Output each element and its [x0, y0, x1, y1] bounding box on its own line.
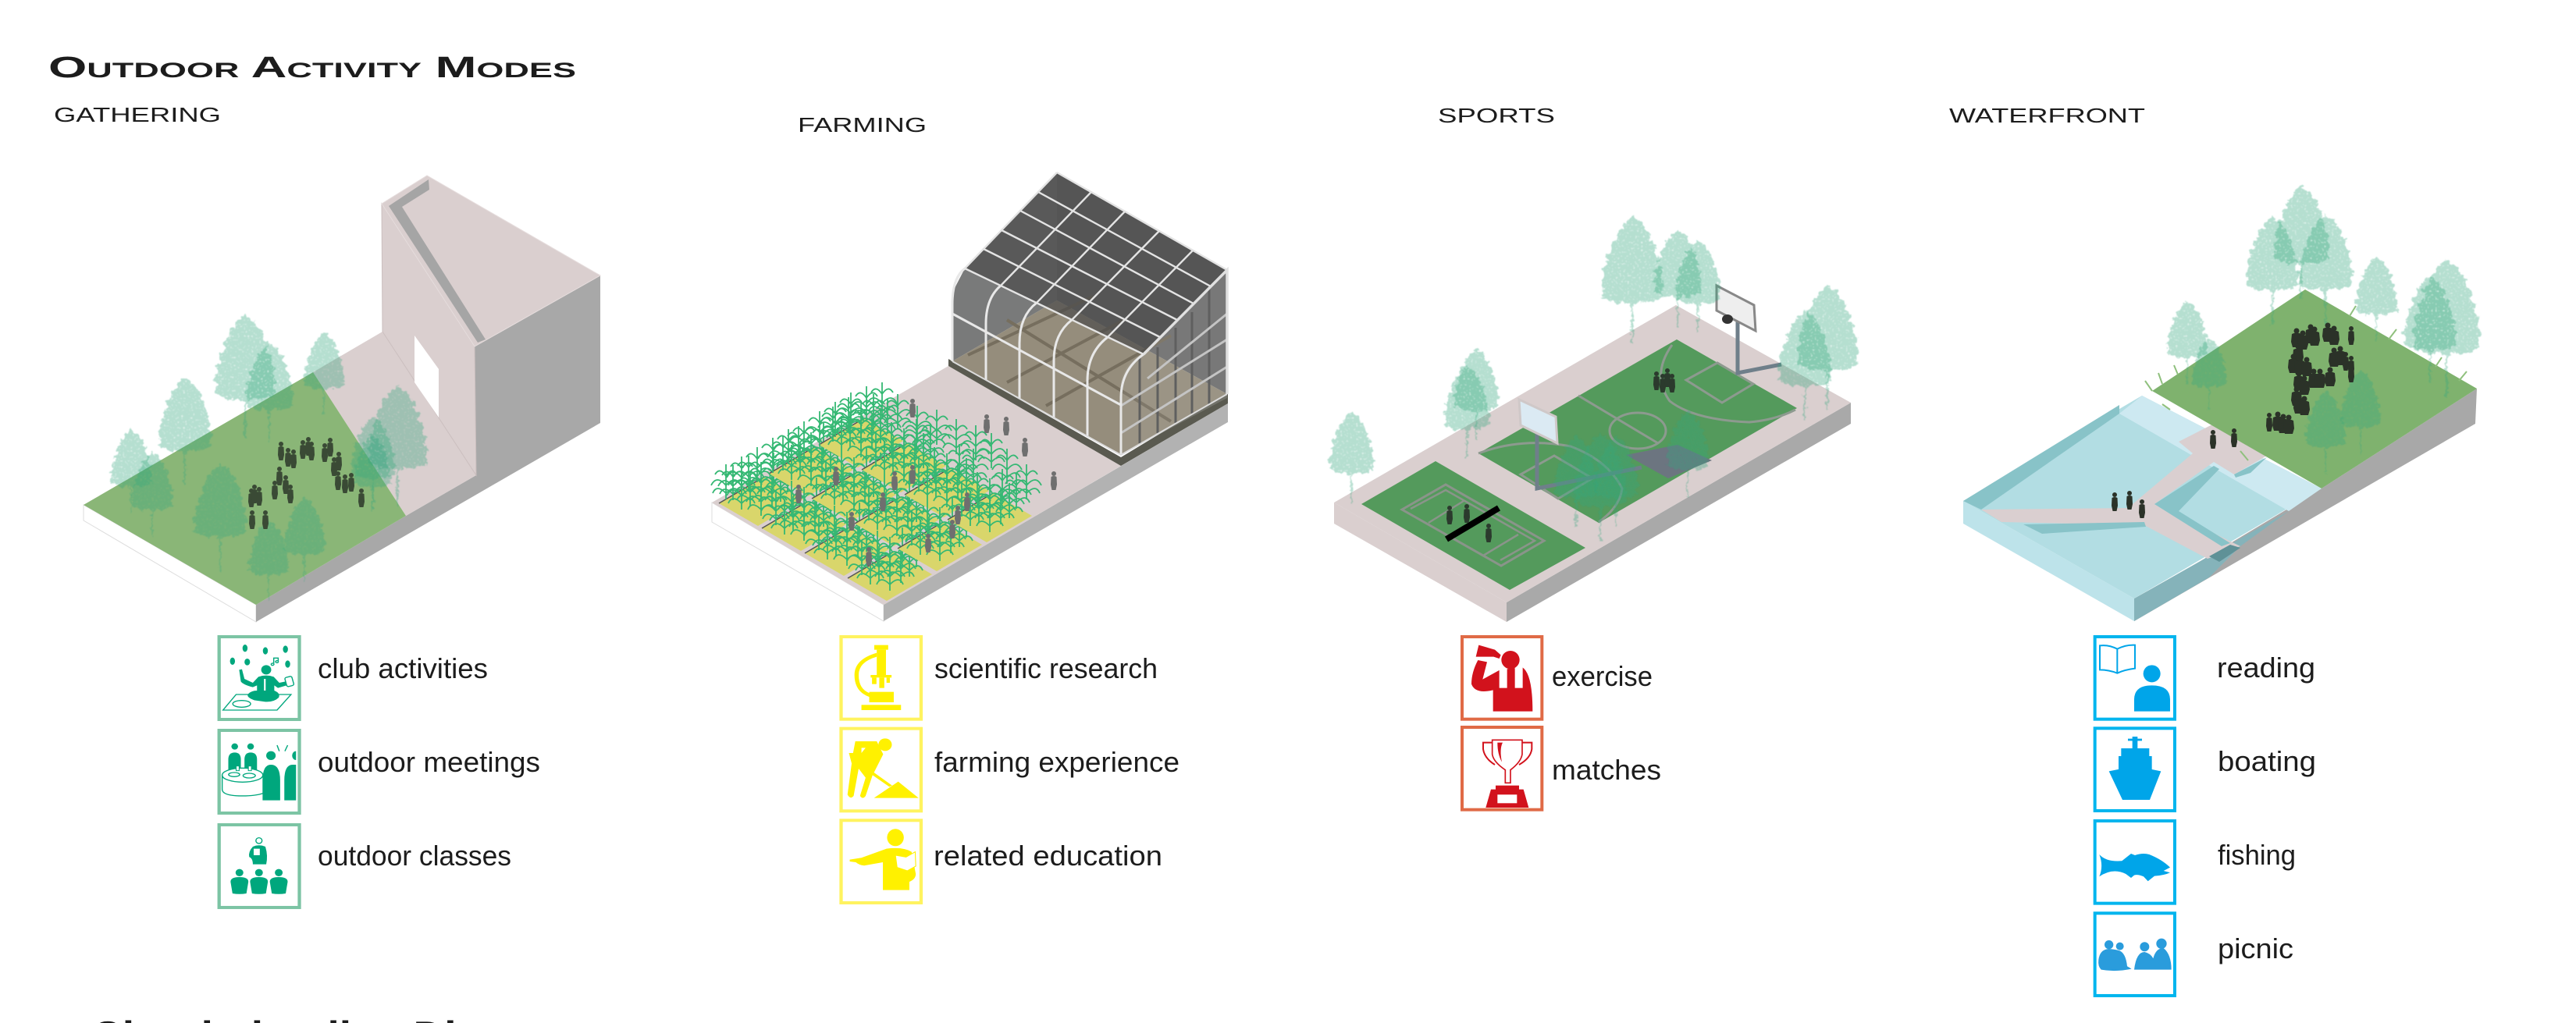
label: matches: matches [1552, 754, 1661, 786]
icon: exercise [1462, 637, 1542, 719]
icon: outdoor meetings [219, 730, 300, 813]
basketball court [1478, 339, 1797, 523]
trees [110, 314, 429, 601]
isometric diagram: farming [711, 172, 1228, 621]
icon: matches [1462, 727, 1542, 810]
heading: waterfront: WATERFRONT [1949, 104, 2145, 127]
title: Outdoor Activity Modes [48, 52, 576, 84]
trees [1328, 215, 1859, 541]
isometric diagram: waterfront [1963, 186, 2482, 621]
people [2112, 323, 2354, 518]
label: club activities: club activities [318, 652, 488, 684]
people [795, 399, 1057, 566]
hoops [1519, 286, 1781, 488]
tennis court [1361, 461, 1585, 590]
label: related education: related education [934, 840, 1162, 872]
greenhouse [948, 172, 1228, 466]
icon: farming experience [841, 729, 921, 811]
people [248, 437, 365, 529]
icon: scientific research [841, 637, 921, 719]
label: scientific research: scientific research [934, 652, 1158, 684]
icon: boating [2095, 728, 2175, 811]
isometric diagram: gathering [84, 176, 600, 622]
label: farming experience: farming experience [934, 746, 1179, 778]
icon: fishing [2095, 821, 2175, 904]
panel: sports [1328, 104, 1859, 810]
icon: club activities [219, 637, 300, 719]
grass lawn [2152, 289, 2477, 488]
heading: sports: SPORTS [1438, 104, 1555, 127]
panel: gathering [54, 103, 600, 908]
label: boating: boating [2218, 745, 2316, 777]
label: exercise: exercise [1552, 660, 1653, 692]
heading: gathering: GATHERING [54, 103, 221, 126]
crop beds [711, 382, 1041, 601]
trees [2166, 186, 2482, 473]
label: picnic: picnic [2218, 932, 2293, 964]
icon: related education [841, 820, 921, 903]
panel: farming [711, 113, 1228, 903]
icon: outdoor classes [219, 825, 300, 908]
panel: waterfront [1949, 104, 2482, 996]
label: reading: reading [2217, 652, 2315, 684]
isometric diagram: sports [1328, 215, 1859, 622]
icon: reading [2095, 637, 2175, 719]
heading: farming: FARMING [798, 113, 927, 137]
label: fishing: fishing [2218, 839, 2296, 871]
label: outdoor meetings: outdoor meetings [318, 746, 540, 778]
icon: picnic [2095, 913, 2175, 996]
label: outdoor classes: outdoor classes [318, 840, 511, 872]
